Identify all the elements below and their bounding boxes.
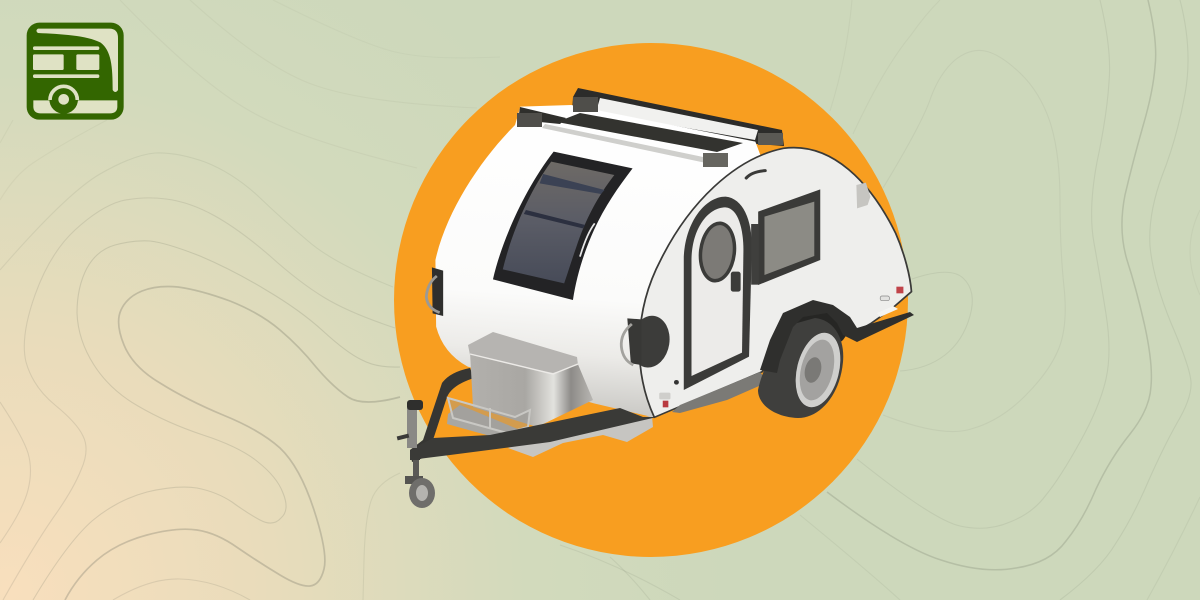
trailer body (426, 105, 911, 417)
logo: green camper badge (27, 23, 124, 120)
front face (639, 148, 911, 417)
logo badge background (27, 23, 124, 120)
logo right window (76, 54, 99, 70)
logo wheel well (49, 85, 78, 114)
rear roof rail (572, 88, 784, 150)
rail brackets (517, 113, 542, 127)
front roof rail with rack (517, 97, 783, 167)
aluminium front storage box (468, 332, 593, 427)
teardrop trailer (397, 88, 914, 508)
door handle (731, 272, 741, 292)
left tongue arm (410, 368, 474, 462)
side grab handle and round vent (621, 313, 673, 370)
logo wheel hub (58, 94, 69, 105)
side window (751, 189, 820, 285)
tongue rail (410, 408, 657, 460)
rear lights (880, 287, 903, 301)
front lights (659, 380, 679, 407)
plate under tongue (508, 416, 653, 457)
rear plate (447, 405, 520, 436)
logo left window (33, 54, 64, 70)
door porthole window (696, 220, 739, 284)
logo upper stripe (33, 46, 99, 50)
main wheel rim (788, 328, 848, 412)
checker plate step (672, 372, 768, 413)
logo lower stripe (33, 74, 99, 78)
wheel well shadow (777, 310, 850, 375)
rear grab handle (426, 267, 443, 316)
entry door (684, 197, 752, 390)
logo ground (33, 100, 117, 113)
side shell (435, 105, 766, 417)
logo wheel arch (50, 86, 77, 100)
wall vent (856, 183, 870, 208)
jack stand and caster (397, 400, 435, 508)
roof skylight window (493, 152, 633, 300)
main wheel tire (758, 318, 843, 418)
orange circle (394, 43, 908, 557)
tongue frame and plate (410, 368, 653, 462)
top grab handle (746, 171, 765, 178)
logo crescent behind camper roof (36, 29, 118, 92)
wire basket (448, 398, 530, 433)
wheel fender and rear step (760, 300, 914, 373)
white strip by rear step (877, 306, 898, 317)
